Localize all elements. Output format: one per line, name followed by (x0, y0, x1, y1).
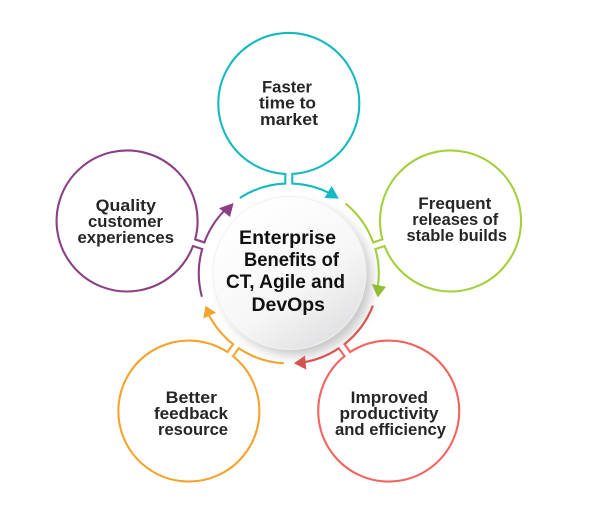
label: faster time to market: market (260, 110, 318, 129)
label: improved productivity and efficiency (335, 388, 447, 439)
title: center heading: CT, Agile and (226, 271, 345, 293)
label: improved productivity and efficiency: and efficiency (335, 420, 447, 439)
label: frequent releases of stable builds: releases of (412, 210, 499, 229)
label: better feedback resource (154, 388, 229, 439)
title: center heading (226, 227, 345, 316)
label: better feedback resource: resource (158, 420, 228, 439)
label: faster time to market (259, 78, 318, 129)
node: better feedback (orange circle, connector and arrow) (90, 293, 301, 510)
node: improved productivity (red circle, connector and arrow) (276, 293, 487, 510)
central disc (213, 196, 371, 355)
node: frequent releases (green circle, connector and arrow) (339, 132, 539, 317)
label: frequent releases of stable builds (406, 194, 507, 245)
node: quality experiences (purple circle, connector and arrow) (38, 132, 239, 317)
label: better feedback resource: feedback (154, 404, 229, 423)
label: quality customer experiences: Quality (96, 196, 157, 215)
title: center heading: Benefits of (244, 249, 339, 271)
title: center heading: Enterprise (239, 227, 336, 249)
label: quality customer experiences: experiences (78, 228, 174, 247)
label: improved productivity and efficiency: productivity (340, 404, 439, 423)
label: faster time to market: time to (259, 94, 316, 112)
label: faster time to market: Faster (262, 78, 312, 97)
node: faster time to market (cyan circle, connector and arrow) (218, 33, 359, 199)
label: improved productivity and efficiency: Improved (351, 388, 428, 407)
label: quality customer experiences: customer (88, 212, 163, 231)
label: frequent releases of stable builds: stable builds (406, 226, 507, 245)
label: frequent releases of stable builds: Frequent (418, 194, 492, 213)
title: center heading: DevOps (252, 294, 325, 316)
label: better feedback resource: Better (166, 388, 217, 407)
label: quality customer experiences (78, 196, 174, 247)
